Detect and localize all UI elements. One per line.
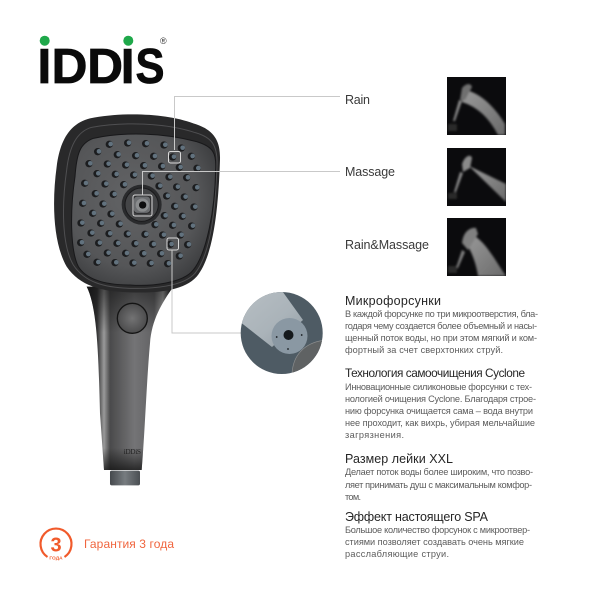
nozzles bbox=[77, 139, 201, 267]
feature text: Размер лейки XXL: том. bbox=[345, 492, 361, 502]
logo: IDDIS: D bbox=[52, 39, 87, 94]
callout: Massage leader line bbox=[133, 172, 340, 216]
thumbnail: Massage mode bbox=[447, 148, 506, 206]
feature text: Микрофорсунки: В каждой форсунке по три микроотверстия, бла- bbox=[345, 309, 538, 319]
thumbnail: Rain mode bbox=[447, 77, 506, 135]
thumbnail: Rain and Massage mode bbox=[447, 218, 506, 276]
feature text: Микрофорсунки: Микрофорсунки bbox=[345, 294, 441, 308]
feature text: Технология самоочищения Cyclone: загрязнения. bbox=[345, 430, 404, 440]
center massage nozzle bbox=[122, 185, 162, 225]
warranty badge: 3 bbox=[50, 534, 62, 556]
label: Massage: Massage bbox=[345, 165, 395, 179]
logo: IDDIS: I bbox=[38, 39, 51, 94]
feature text: Размер лейки XXL: Делает поток воды более широким, что позво- bbox=[345, 467, 533, 477]
label: Rain: Rain bbox=[345, 93, 370, 107]
logo: IDDIS: ® bbox=[160, 36, 167, 46]
logo: IDDIS: S bbox=[136, 39, 164, 94]
feature text: Технология самоочищения Cyclone bbox=[345, 366, 536, 440]
feature text: Эффект настоящего SPA: стиями позволяет создавать очень мягкие bbox=[345, 537, 524, 547]
logo: IDDIS: I bbox=[121, 39, 135, 94]
warranty badge bbox=[40, 529, 72, 562]
handle bbox=[87, 287, 173, 485]
warranty badge: ГОДА bbox=[49, 556, 63, 562]
callout: nozzle detail leader line bbox=[167, 238, 241, 333]
feature text: Микрофорсунки bbox=[345, 294, 538, 355]
feature text: Эффект настоящего SPA bbox=[345, 510, 530, 559]
feature text: Эффект настоящего SPA: расслабляющие струи. bbox=[345, 549, 449, 559]
callout: Rain leader line bbox=[168, 96, 340, 163]
head and nozzles bbox=[54, 114, 220, 293]
feature text: Микрофорсунки: фортный за счет сверхтонких струй. bbox=[345, 345, 503, 355]
shower head product bbox=[54, 114, 220, 485]
feature text: Технология самоочищения Cyclone: нию форсунка очищается сама – вода внутри bbox=[345, 406, 533, 416]
feature text: Размер лейки XXL bbox=[345, 452, 533, 502]
feature text: Микрофорсунки: годаря чему создается более объемный и насы- bbox=[345, 321, 537, 331]
label: Rain&Massage: Rain&Massage bbox=[345, 238, 429, 252]
feature text: Технология самоочищения Cyclone: Технология самоочищения Cyclone bbox=[345, 366, 525, 380]
feature text: Размер лейки XXL: ляет принимать душ с максимальным комфор- bbox=[345, 480, 532, 490]
feature text: Микрофорсунки: щенный поток воды, но при этом мягкий и ком- bbox=[345, 333, 537, 343]
feature text: Эффект настоящего SPA: Большое количество форсунок с микроотвер- bbox=[345, 525, 530, 535]
nozzle detail circle bbox=[240, 292, 323, 374]
feature text: Технология самоочищения Cyclone: Инновационные силиконовые форсунки с тех- bbox=[345, 382, 532, 392]
logo: IDDIS bbox=[38, 36, 167, 94]
warranty text: Гарантия 3 года bbox=[84, 537, 174, 551]
feature text: Размер лейки XXL: Размер лейки XXL bbox=[345, 452, 453, 466]
feature text: Технология самоочищения Cyclone: нологией очищения Cyclone. Благодаря строе- bbox=[345, 394, 536, 404]
handle: iDDiS bbox=[124, 447, 141, 456]
logo: IDDIS: D bbox=[87, 39, 123, 94]
feature text: Технология самоочищения Cyclone: нее проходит, как вихрь, убирая мельчайшие bbox=[345, 418, 535, 428]
infographic canvas bbox=[39, 36, 538, 560]
feature text: Эффект настоящего SPA: Эффект настоящего SPA bbox=[345, 510, 489, 524]
